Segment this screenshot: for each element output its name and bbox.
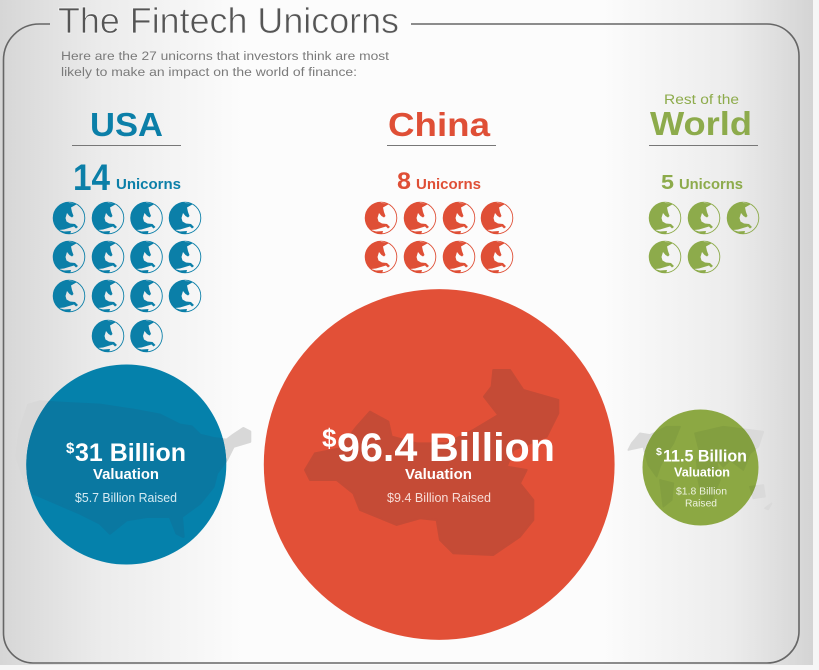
World heading: World: [650, 105, 752, 142]
World valuation text: 11.5 Billion: [663, 447, 747, 466]
World valuation text: $1.8 Billion: [676, 486, 727, 498]
China map and valuation bubble: [264, 289, 615, 640]
World heading: Rest of the: [664, 92, 739, 107]
USA heading: USA: [90, 106, 163, 143]
China valuation text: Valuation: [405, 467, 472, 483]
intro text: Here are the 27 unicorns that investors think are most: [61, 49, 390, 63]
China unicorn count: [397, 168, 481, 195]
China unicorn count: 8: [397, 168, 411, 195]
China unicorn icons: [364, 201, 513, 274]
USA valuation text: $5.7 Billion Raised: [75, 491, 177, 505]
World heading: [650, 92, 752, 142]
China valuation text: $: [322, 423, 337, 453]
USA unicorn count: Unicorns: [116, 177, 181, 193]
World map and valuation bubble: [628, 410, 772, 526]
World unicorn count: [661, 172, 743, 194]
USA unicorn count: 14: [73, 157, 110, 198]
World unicorn icons: [648, 201, 759, 274]
intro text: likely to make an impact on the world of finance:: [61, 65, 357, 79]
World valuation text: Raised: [685, 498, 717, 510]
USA unicorn icons: [52, 201, 201, 353]
World valuation text: [656, 446, 747, 510]
panel: China: [264, 106, 615, 640]
title: The Fintech Unicorns: [58, 0, 399, 41]
World valuation text: Valuation: [674, 466, 730, 480]
China unicorn count: Unicorns: [416, 177, 481, 193]
World unicorn count: Unicorns: [679, 177, 743, 193]
USA valuation text: [66, 439, 186, 505]
USA unicorn count: [73, 157, 181, 198]
USA valuation text: 31 Billion: [75, 439, 186, 467]
China valuation text: [322, 423, 555, 505]
World valuation text: $: [656, 446, 662, 458]
China heading: China: [388, 106, 491, 143]
China valuation text: 96.4 Billion: [337, 426, 555, 470]
USA valuation text: $: [66, 440, 75, 457]
panel: Rest of the World: [628, 92, 772, 526]
panel: USA: [17, 106, 250, 564]
USA map and valuation bubble: [17, 364, 250, 564]
USA valuation text: Valuation: [93, 467, 159, 483]
China valuation text: $9.4 Billion Raised: [387, 491, 491, 505]
World unicorn count: 5: [661, 172, 674, 194]
